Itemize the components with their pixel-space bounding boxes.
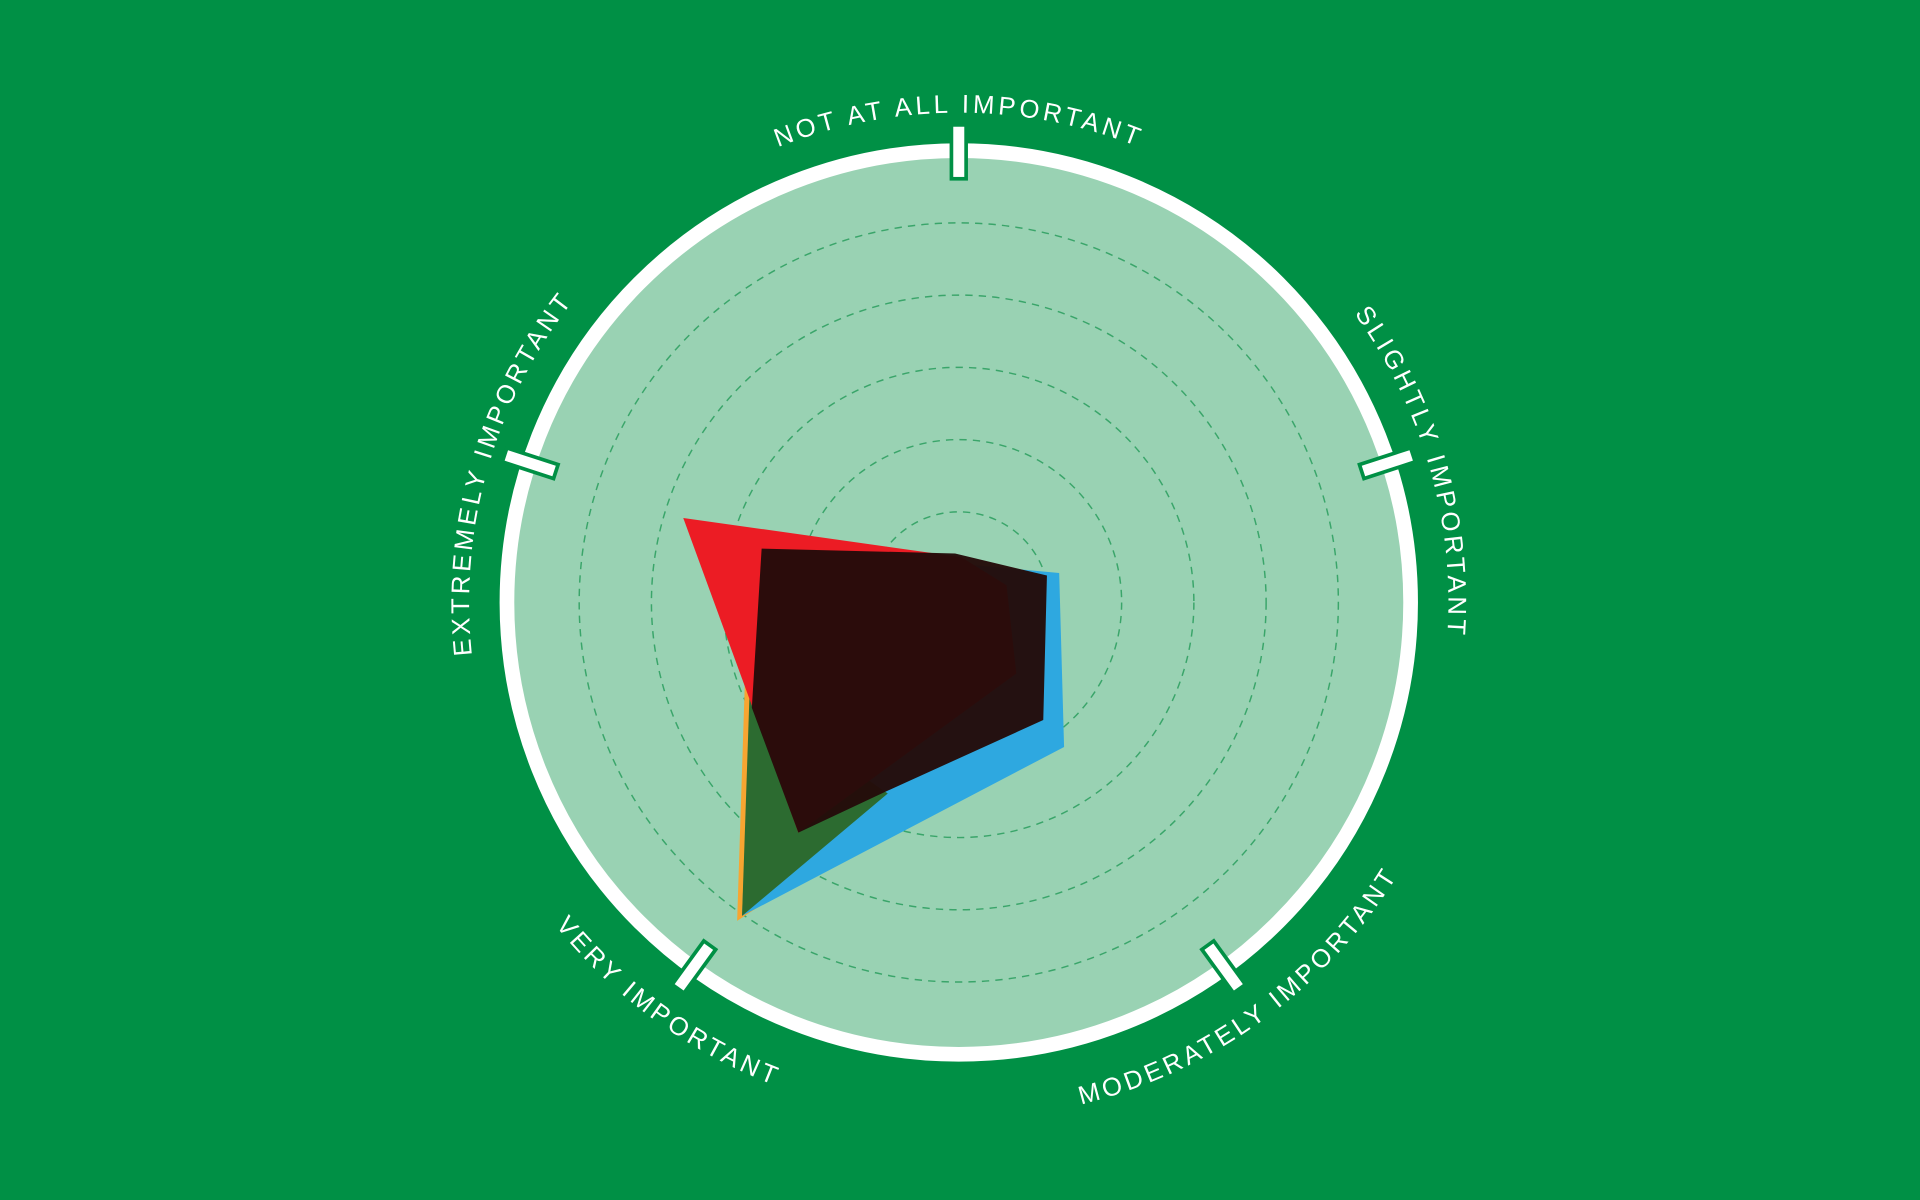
tick marks — [502, 125, 1415, 993]
chart disc — [507, 151, 1411, 1054]
axis labels: MODERATELY IMPORTANT — [1078, 868, 1393, 1104]
axis labels: NOT AT ALL IMPORTANT — [774, 95, 1142, 146]
axis labels: VERY IMPORTANT — [560, 914, 780, 1082]
axis labels: SLIGHTLY IMPORTANT — [1357, 306, 1466, 635]
axis labels: EXTREMELY IMPORTANT — [451, 292, 568, 655]
axis labels — [451, 95, 1466, 1104]
data polygons — [683, 518, 1064, 921]
